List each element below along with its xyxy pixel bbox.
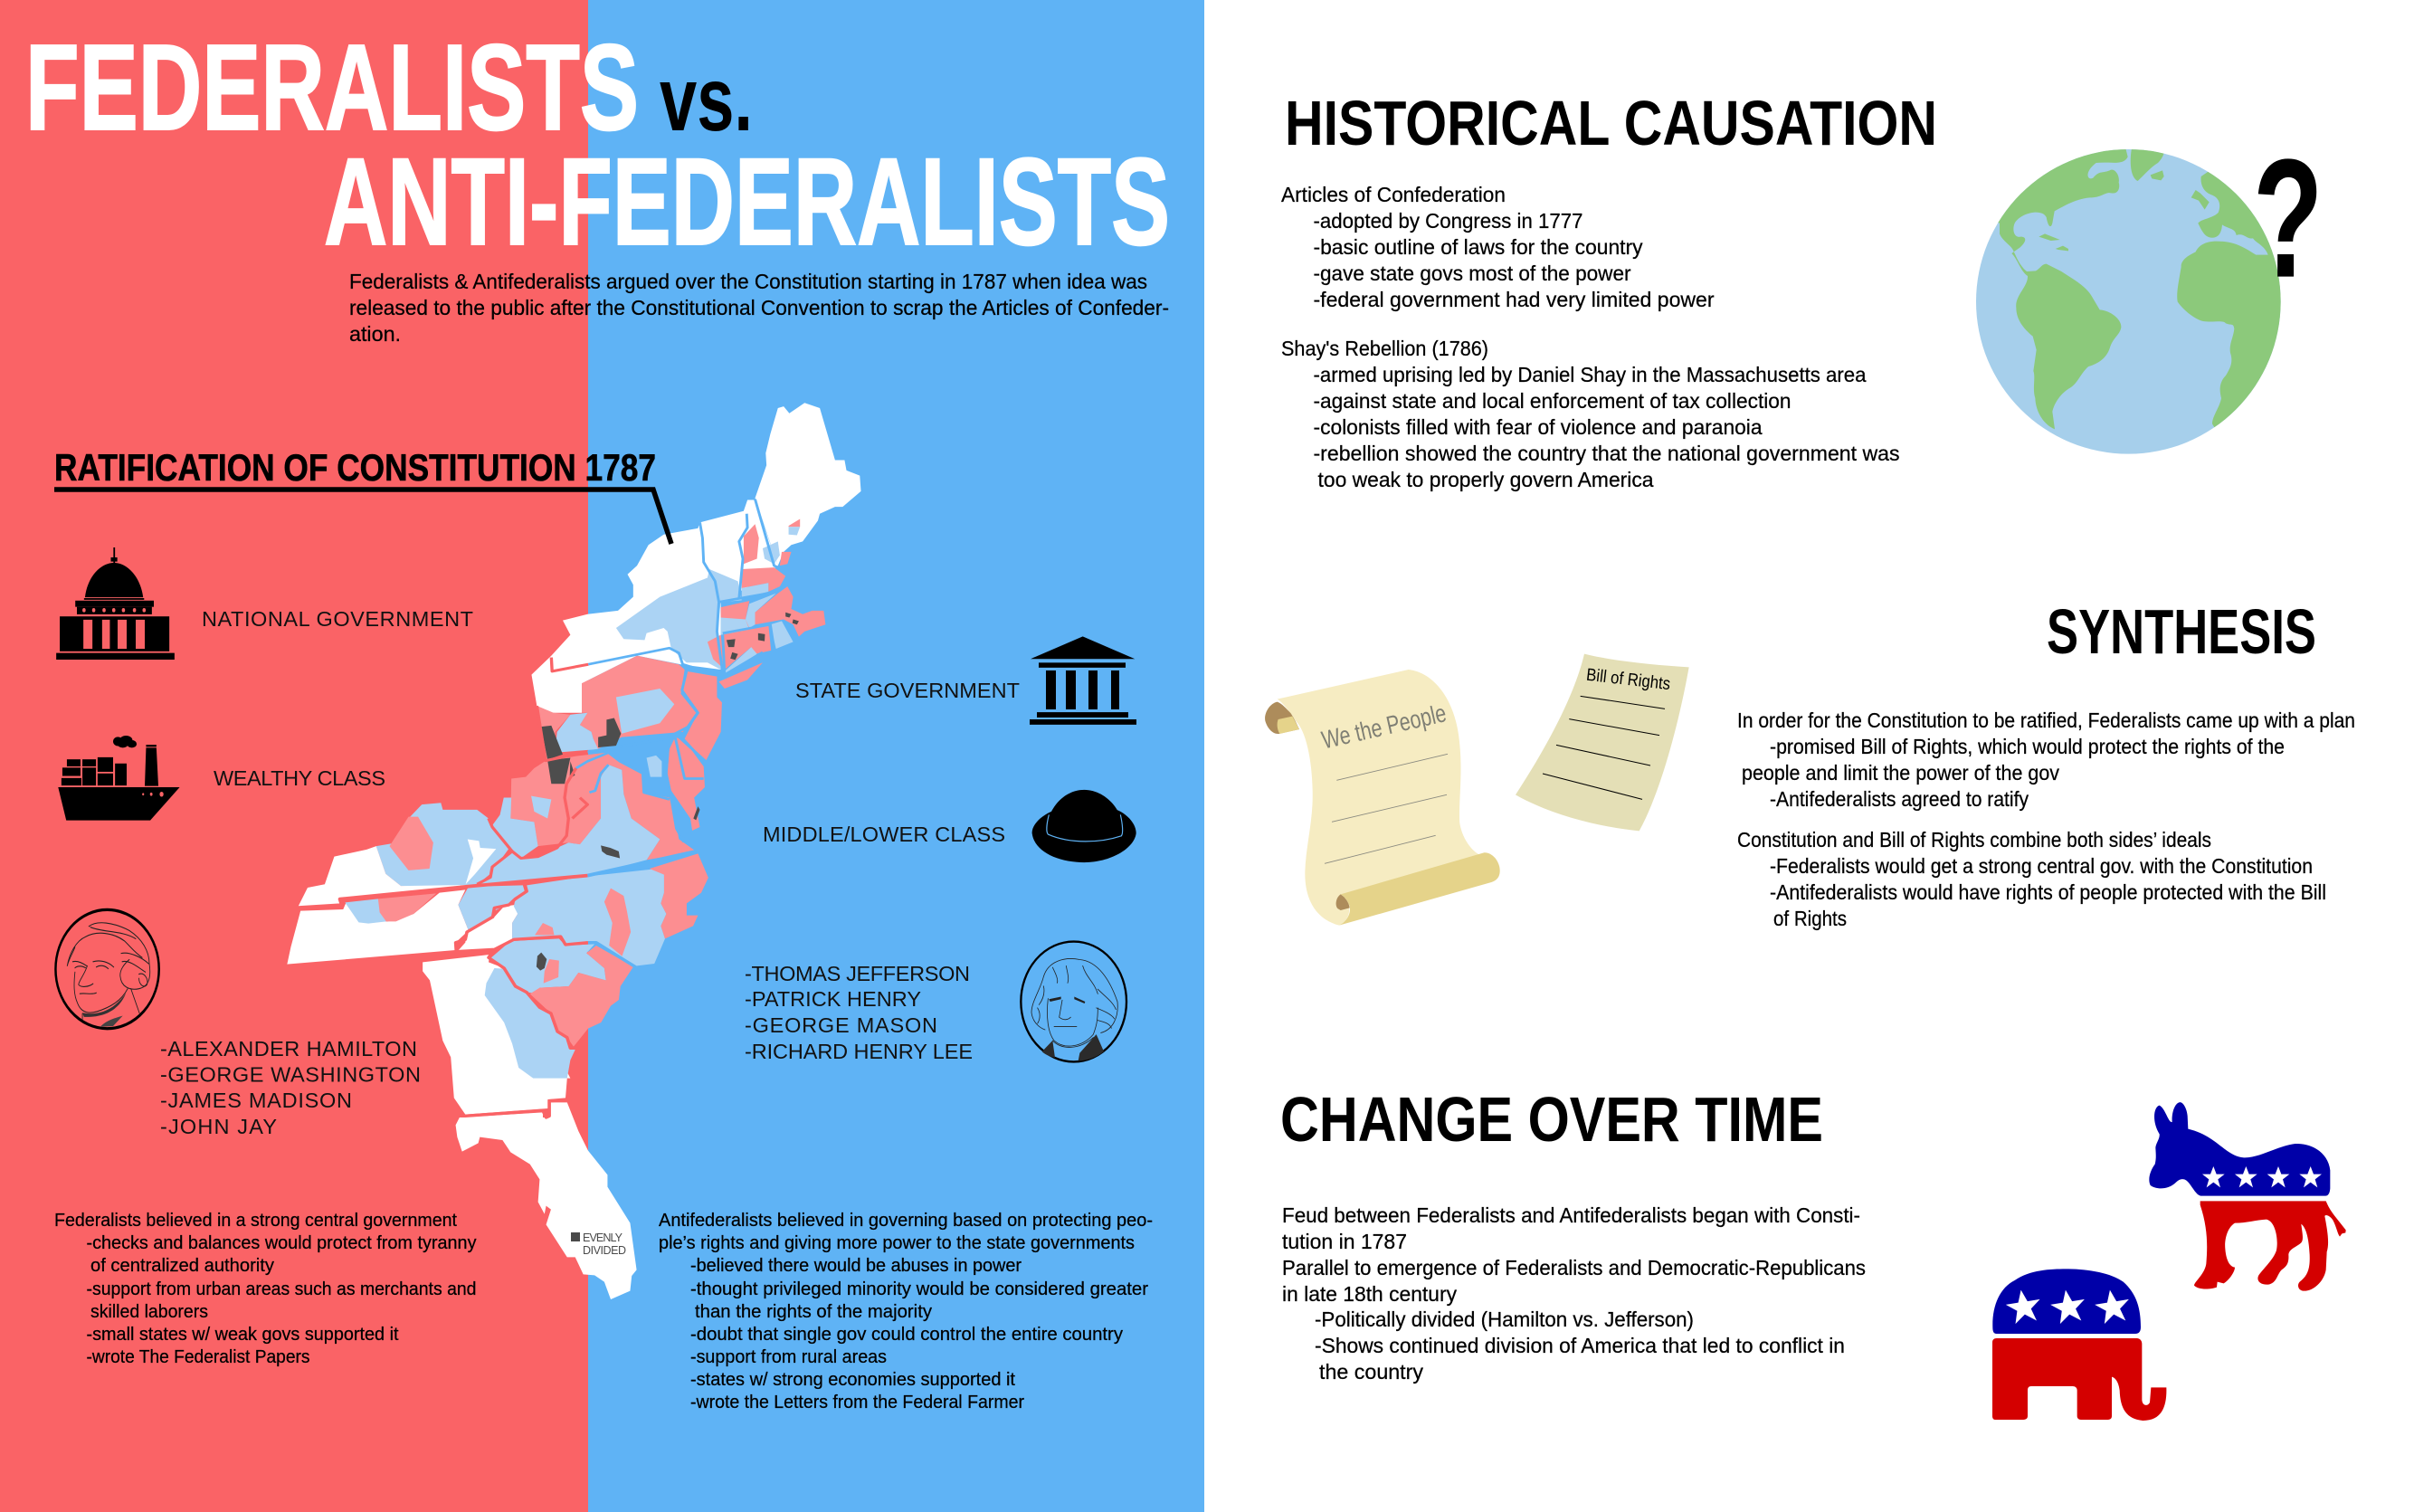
text block: change over time: Parallel to emergence of Federalists and Democratic-Republicans	[1282, 1256, 1866, 1279]
title: FEDERALISTS	[25, 19, 639, 156]
title	[25, 19, 1170, 271]
text block: change over time: the country	[1319, 1360, 1423, 1384]
anti-federalist names: -GEORGE MASON	[745, 1013, 937, 1037]
heading: change over time: CHANGE OVER TIME	[1280, 1084, 1823, 1155]
anti-federalists text block: -support from rural areas	[690, 1346, 887, 1367]
text block: synthesis: Constitution and Bill of Rights combine both sides’ ideals	[1737, 828, 2211, 851]
federalists text block: skilled laborers	[90, 1301, 208, 1322]
text block: synthesis: of Rights	[1773, 907, 1847, 930]
intro paragraph: ation.	[349, 322, 401, 346]
panel: anti-federalists blue background	[588, 0, 1204, 1512]
text block: historical causation: -federal government had very limited power	[1314, 288, 1715, 311]
anti-federalists text block: ple’s rights and giving more power to the state governments	[659, 1232, 1135, 1253]
label: state government: STATE GOVERNMENT	[795, 679, 1020, 702]
title: ANTI-FEDERALISTS	[324, 133, 1170, 271]
anti-federalists text block: Antifederalists believed in governing based on protecting peo-	[659, 1210, 1153, 1231]
text block: synthesis: -Antifederalists agreed to ratify	[1770, 787, 2029, 811]
label: wealthy class: WEALTHY CLASS	[214, 766, 385, 790]
map pointer: ratification heading with underline leader: RATIFICATION OF CONSTITUTION 1787	[54, 446, 656, 489]
map legend: evenly divided: DIVIDED	[583, 1244, 626, 1257]
icon: constitution scroll: We the People	[1319, 699, 1449, 755]
federalist names	[160, 1037, 421, 1138]
text block: change over time	[1282, 1203, 1866, 1384]
icon: capitol building	[56, 547, 175, 660]
southern states	[287, 853, 708, 1299]
icon: hat	[1032, 790, 1136, 862]
text block: synthesis: In order for the Constitution to be ratified, Federalists came up with a plan	[1737, 708, 2355, 732]
icon: cargo ship	[58, 736, 180, 821]
text block: historical causation: Articles of Confederation	[1281, 183, 1506, 206]
map legend: evenly divided: EVENLY	[583, 1231, 623, 1244]
anti-federalist names: -RICHARD HENRY LEE	[745, 1040, 973, 1063]
anti-federalist names: -THOMAS JEFFERSON	[745, 962, 970, 985]
text block: synthesis: -promised Bill of Rights, which would protect the rights of the	[1770, 735, 2285, 758]
federalists text block: Federalists believed in a strong central government	[54, 1210, 457, 1231]
label: middle/lower class: MIDDLE/LOWER CLASS	[763, 823, 1005, 846]
heading: historical causation: HISTORICAL CAUSATION	[1285, 88, 1937, 158]
federalists text block: -checks and balances would protect from tyranny	[87, 1232, 477, 1253]
intro paragraph: Federalists & Antifederalists argued over the Constitution starting in 1787 when idea was	[349, 270, 1147, 293]
icon: bill of rights paper: Bill of Rights	[1585, 666, 1671, 694]
text block: change over time: tution in 1787	[1282, 1230, 1407, 1253]
title: vs.	[660, 49, 753, 150]
federalists text block: -small states w/ weak govs supported it	[87, 1324, 399, 1345]
federalists text block: -wrote The Federalist Papers	[87, 1346, 309, 1367]
icon: democratic donkey	[2149, 1102, 2346, 1291]
icon: republican elephant	[1992, 1269, 2166, 1421]
anti-federalist names	[745, 962, 973, 1063]
federalists text block: -support from urban areas such as merchants and	[87, 1279, 476, 1299]
anti-federalists text block	[659, 1210, 1153, 1412]
text block: change over time: in late 18th century	[1282, 1282, 1457, 1306]
text block: synthesis: -Federalists would get a strong central gov. with the Constitution	[1770, 854, 2313, 878]
text block: historical causation: -colonists filled with fear of violence and paranoia	[1314, 415, 1763, 439]
text block: historical causation: -gave state govs most of the power	[1314, 262, 1631, 285]
text block: change over time: -Politically divided (Hamilton vs. Jefferson)	[1315, 1308, 1694, 1331]
icon: constitution scroll	[1265, 670, 1500, 926]
text block: historical causation: -basic outline of laws for the country	[1314, 235, 1643, 259]
icon: globe with question mark: ?	[2253, 124, 2324, 312]
map of state ratification votes	[287, 403, 861, 1299]
heading: synthesis: SYNTHESIS	[2047, 596, 2316, 667]
text block: historical causation: -rebellion showed the country that the national government was	[1314, 442, 1900, 465]
state border lines north	[298, 499, 786, 908]
portrait: Thomas Jefferson	[1021, 942, 1126, 1061]
anti-federalists text block: -believed there would be abuses in power	[690, 1255, 1022, 1276]
map pointer: ratification heading with underline leader	[54, 446, 671, 544]
federalist names: -JAMES MADISON	[160, 1089, 352, 1112]
federalist names: -GEORGE WASHINGTON	[160, 1062, 421, 1086]
intro paragraph: released to the public after the Constitutional Convention to scrap the Articles of Confeder-	[349, 296, 1169, 319]
icon: globe with question mark	[1976, 124, 2324, 454]
text block: historical causation: too weak to properly govern America	[1317, 468, 1654, 491]
anti-federalists text block: -wrote the Letters from the Federal Farmer	[690, 1392, 1024, 1412]
text block: historical causation: -armed uprising led by Daniel Shay in the Massachusetts area	[1314, 363, 1867, 386]
text block: change over time: -Shows continued division of America that led to conflict in	[1315, 1334, 1845, 1357]
text block: historical causation: Shay's Rebellion (1786)	[1281, 337, 1488, 360]
federalist names: -ALEXANDER HAMILTON	[160, 1037, 417, 1060]
text block: historical causation: -against state and local enforcement of tax collection	[1314, 389, 1791, 413]
label: national government: NATIONAL GOVERNMENT	[202, 607, 473, 631]
northern states	[298, 403, 861, 907]
anti-federalist names: -PATRICK HENRY	[745, 987, 921, 1011]
federalist names: -JOHN JAY	[160, 1115, 277, 1138]
anti-federalists text block: -states w/ strong economies supported it	[690, 1369, 1015, 1390]
text block: synthesis	[1737, 708, 2355, 930]
icon: state government temple	[1030, 636, 1136, 725]
text block: synthesis: -Antifederalists would have rights of people protected with the Bill	[1770, 880, 2326, 904]
anti-federalists text block: than the rights of the majority	[695, 1301, 933, 1322]
map legend: evenly divided	[571, 1231, 626, 1257]
state border lines south	[287, 885, 635, 1117]
anti-federalists text block: -doubt that single gov could control the entire country	[690, 1324, 1124, 1345]
intro paragraph	[349, 270, 1169, 346]
text block: change over time: Feud between Federalists and Antifederalists began with Consti-	[1282, 1203, 1860, 1227]
text block: synthesis: people and limit the power of the gov	[1742, 761, 2059, 785]
federalists text block	[54, 1210, 477, 1367]
anti-federalists text block: -thought privileged minority would be considered greater	[690, 1279, 1148, 1299]
portrait: Alexander Hamilton	[55, 909, 159, 1029]
icon: bill of rights paper	[1516, 654, 1689, 831]
text block: historical causation	[1281, 183, 1900, 491]
panel: federalists red background	[0, 0, 588, 1512]
federalists text block: of centralized authority	[90, 1255, 275, 1276]
text block: historical causation: -adopted by Congress in 1777	[1314, 209, 1583, 233]
